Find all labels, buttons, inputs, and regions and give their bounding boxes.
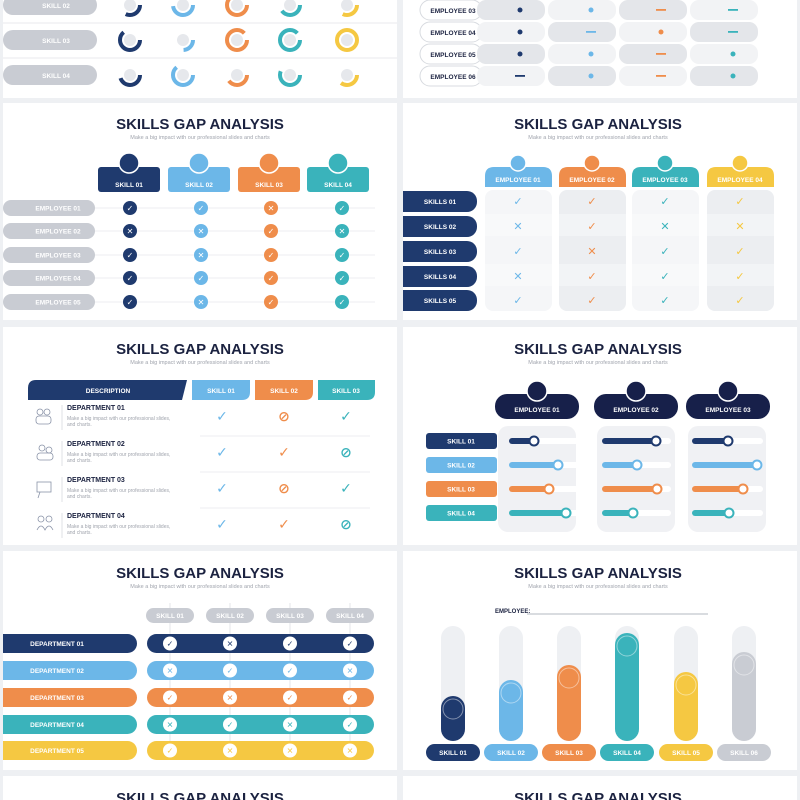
skill header pills: SKILL 02	[216, 613, 244, 620]
check / cross icons	[123, 201, 349, 309]
check marks: ✓	[735, 294, 745, 307]
check marks: ✓	[587, 195, 597, 208]
skill header pills	[146, 603, 374, 760]
check / cross icons: ✕	[347, 666, 353, 676]
check / cross icons: ✓	[347, 694, 353, 702]
check / cross icons: ✕	[167, 666, 173, 676]
table headers: SKILL 03	[332, 388, 360, 395]
department rows: Make a big impact with our professional slides,	[67, 452, 170, 458]
subtitle: Make a big impact with our professional slides and charts	[130, 135, 270, 141]
subtitle: Make a big impact with our professional slides and charts	[528, 360, 668, 366]
skill marks: ⊘	[340, 517, 352, 533]
check / cross icons: ✓	[167, 694, 173, 702]
skill header pills: SKILL 01	[156, 613, 184, 620]
employee headers: EMPLOYEE 03	[642, 177, 688, 184]
check marks: ✓	[660, 245, 670, 258]
employee columns: EMPLOYEE 01	[514, 407, 560, 414]
check marks: ✓	[735, 195, 745, 208]
employee headers: EMPLOYEE 04	[717, 177, 763, 184]
check / cross icons: ✕	[127, 227, 133, 236]
panel: slide 2 left (skills vs employees check matrix)	[3, 103, 397, 320]
employee headers: EMPLOYEE 01	[495, 177, 541, 184]
skill header pills: SKILL 04	[336, 613, 364, 620]
employee labels	[420, 0, 482, 86]
skill labels: SKILL 03	[447, 486, 475, 494]
skill labels: SKILL 01	[447, 438, 475, 446]
department rows: DEPARTMENT 02	[30, 668, 84, 675]
employee headers	[485, 155, 774, 187]
skill labels: SKILL 05	[672, 750, 700, 757]
check / cross icons: ✕	[339, 227, 345, 236]
department rows: DEPARTMENT 04	[30, 722, 84, 729]
donut charts	[120, 0, 357, 85]
department rows: and charts.	[67, 458, 92, 464]
skill headers	[98, 153, 369, 192]
check / cross icons: ✓	[268, 298, 274, 307]
table headers	[28, 380, 375, 400]
skill marks: ✓	[340, 481, 352, 497]
check / cross icons: ✕	[287, 746, 293, 756]
department rows: DEPARTMENT 03	[30, 695, 84, 702]
check / cross icons: ✓	[287, 640, 293, 648]
check marks: ✕	[660, 220, 670, 233]
check / cross icons: ✕	[268, 204, 274, 213]
skill marks: ✓	[278, 445, 290, 461]
check / cross icons: ✓	[167, 640, 173, 648]
employee field: EMPLOYEE:	[495, 609, 530, 615]
department rows: and charts.	[67, 530, 92, 536]
check marks: ✓	[660, 294, 670, 307]
employee labels: EMPLOYEE 06	[430, 74, 476, 81]
panel: slide 3 right (employee skill sliders)	[403, 327, 797, 545]
department rows: Make a big impact with our professional slides,	[67, 524, 170, 530]
check / cross icons: ✕	[227, 694, 233, 702]
check / cross icons: ✕	[347, 746, 353, 756]
subtitle: Make a big impact with our professional slides and charts	[130, 584, 270, 590]
employee rows	[3, 200, 375, 310]
check / cross icons: ✓	[287, 666, 293, 676]
check / cross icons: ✓	[167, 746, 173, 756]
title: SKILLS GAP ANALYSIS	[514, 341, 682, 358]
panel: top-right partial slide (employee grid)	[403, 0, 797, 98]
department rows: Make a big impact with our professional slides,	[67, 488, 170, 494]
panel: slide 4 right (vertical skill bar chart)	[403, 551, 797, 770]
title: SKILLS GAP ANALYSIS	[514, 116, 682, 133]
skill marks: ⊘	[278, 481, 290, 497]
check / cross icons: ✕	[198, 227, 204, 236]
skill marks: ⊘	[278, 409, 290, 425]
skill labels: SKILLS 01	[424, 199, 456, 206]
check marks: ✕	[587, 245, 597, 258]
employee rows: EMPLOYEE 03	[35, 252, 81, 260]
employee columns	[495, 381, 770, 532]
sliders	[512, 436, 762, 518]
department rows: and charts.	[67, 494, 92, 500]
check / cross icons: ✓	[227, 720, 233, 730]
check marks: ✕	[513, 270, 523, 283]
bar chart	[441, 626, 756, 741]
check / cross icons: ✓	[339, 251, 345, 260]
employee columns: EMPLOYEE 03	[705, 407, 751, 414]
skill marks: ✓	[278, 517, 290, 533]
skill labels	[403, 191, 477, 311]
check / cross icons: ✓	[347, 720, 353, 730]
check marks	[513, 195, 745, 307]
check / cross icons: ✓	[268, 274, 274, 283]
panel: slide 2 right (employees vs skills table)	[403, 103, 797, 320]
skill labels: SKILL 01	[439, 750, 467, 757]
skill labels: SKILL 04	[613, 750, 641, 757]
check / cross icons: ✕	[287, 720, 293, 730]
title: SKILLS GAP ANALYSIS	[116, 565, 284, 582]
table cells	[485, 190, 774, 311]
check / cross icons: ✓	[339, 274, 345, 283]
check marks: ✓	[587, 270, 597, 283]
skill marks: ✓	[216, 517, 228, 533]
department rows: DEPARTMENT 01	[30, 641, 84, 648]
check / cross icons	[163, 636, 357, 758]
skill labels: SKILL 04	[447, 510, 475, 518]
skill labels: SKILL 03	[555, 750, 583, 757]
employee rows: EMPLOYEE 05	[35, 300, 81, 306]
skill marks: ✓	[216, 409, 228, 425]
panel: top-left partial slide (skill donuts)	[3, 0, 397, 98]
subtitle: Make a big impact with our professional slides and charts	[130, 360, 270, 366]
subtitle: Make a big impact with our professional slides and charts	[528, 135, 668, 141]
skill labels: SKILL 02	[497, 750, 525, 757]
check / cross icons: ✓	[268, 251, 274, 260]
department rows: DEPARTMENT 02	[67, 441, 125, 448]
check / cross icons: ✓	[287, 694, 293, 702]
skill labels: SKILL 02	[447, 462, 475, 470]
skill header pills: SKILL 03	[276, 613, 304, 620]
employee rows: EMPLOYEE 04	[35, 276, 81, 282]
check / cross icons: ✓	[127, 274, 133, 283]
check marks: ✕	[735, 220, 745, 233]
table headers: SKILL 01	[207, 388, 235, 395]
skill labels: SKILLS 04	[424, 274, 456, 281]
title: SKILLS GAP ANALYSIS	[116, 341, 284, 358]
check marks: ✓	[513, 294, 523, 307]
check / cross icons: ✕	[167, 720, 173, 730]
skill marks: ✓	[216, 445, 228, 461]
title: SKILLS GAP ANALYSIS	[116, 116, 284, 133]
check / cross icons: ✓	[339, 298, 345, 307]
skill headers: SKILL 02	[185, 182, 213, 189]
title: SKILLS GAP ANALYSIS	[514, 565, 682, 582]
check / cross icons: ✕	[227, 746, 233, 756]
check marks: ✓	[513, 245, 523, 258]
employee rows: EMPLOYEE 01	[35, 206, 81, 212]
skill marks: ✓	[340, 409, 352, 425]
skill labels: SKILL 06	[730, 750, 758, 757]
department rows	[36, 405, 370, 538]
employee labels: EMPLOYEE 03	[430, 8, 476, 15]
grid cells	[477, 0, 758, 86]
panel: slide 4 left (department skill bars)	[3, 551, 397, 770]
check / cross icons: ✓	[127, 204, 133, 213]
employee headers: EMPLOYEE 02	[569, 177, 615, 184]
panel: bottom partial slides	[3, 776, 797, 800]
department rows: DEPARTMENT 03	[67, 477, 125, 484]
skill labels	[426, 744, 771, 761]
department rows	[3, 634, 374, 760]
check marks: ✓	[587, 294, 597, 307]
skill marks: ✓	[216, 481, 228, 497]
department rows: DEPARTMENT 04	[67, 513, 125, 520]
check marks: ✓	[513, 195, 523, 208]
employee rows: EMPLOYEE 02	[35, 228, 81, 236]
skill headers: SKILL 04	[324, 182, 352, 189]
check / cross icons: ✓	[127, 298, 133, 307]
skill pills	[3, 0, 97, 85]
skill headers: SKILL 01	[115, 182, 143, 189]
table headers: DESCRIPTION	[86, 388, 131, 395]
subtitle: Make a big impact with our professional slides and charts	[528, 584, 668, 590]
check marks: ✓	[587, 220, 597, 233]
check / cross icons: ✓	[227, 666, 233, 676]
skill labels: SKILLS 02	[424, 224, 456, 231]
skill labels: SKILLS 03	[424, 249, 456, 256]
employee labels: EMPLOYEE 05	[430, 52, 476, 59]
skill labels	[426, 433, 497, 521]
table headers: SKILL 02	[270, 388, 298, 395]
department rows: DEPARTMENT 01	[67, 405, 125, 412]
skill pills: SKILL 03	[42, 38, 70, 45]
check / cross icons: ✓	[339, 204, 345, 213]
check marks: ✕	[513, 220, 523, 233]
check / cross icons: ✕	[227, 640, 233, 648]
employee columns: EMPLOYEE 02	[613, 407, 659, 414]
employee labels: EMPLOYEE 04	[430, 30, 476, 37]
check / cross icons: ✓	[127, 251, 133, 260]
check / cross icons: ✓	[198, 204, 204, 213]
check marks: ✓	[660, 270, 670, 283]
department rows: DEPARTMENT 05	[30, 748, 84, 755]
skill labels: SKILLS 05	[424, 298, 456, 305]
skill marks: ⊘	[340, 445, 352, 461]
check marks: ✓	[660, 195, 670, 208]
check / cross icons: ✕	[198, 298, 204, 307]
check / cross icons: ✓	[347, 640, 353, 648]
department rows: Make a big impact with our professional slides,	[67, 416, 170, 422]
check / cross icons: ✕	[198, 251, 204, 260]
department rows: and charts.	[67, 422, 92, 428]
check marks: ✓	[735, 245, 745, 258]
skill marks	[216, 409, 352, 533]
check / cross icons: ✓	[268, 227, 274, 236]
check marks: ✓	[735, 270, 745, 283]
skill pills: SKILL 02	[42, 3, 70, 10]
skill pills: SKILL 04	[42, 73, 70, 80]
panel: slide 3 left (departments description table)	[3, 327, 397, 545]
skill headers: SKILL 03	[255, 182, 283, 189]
check / cross icons: ✓	[198, 274, 204, 283]
